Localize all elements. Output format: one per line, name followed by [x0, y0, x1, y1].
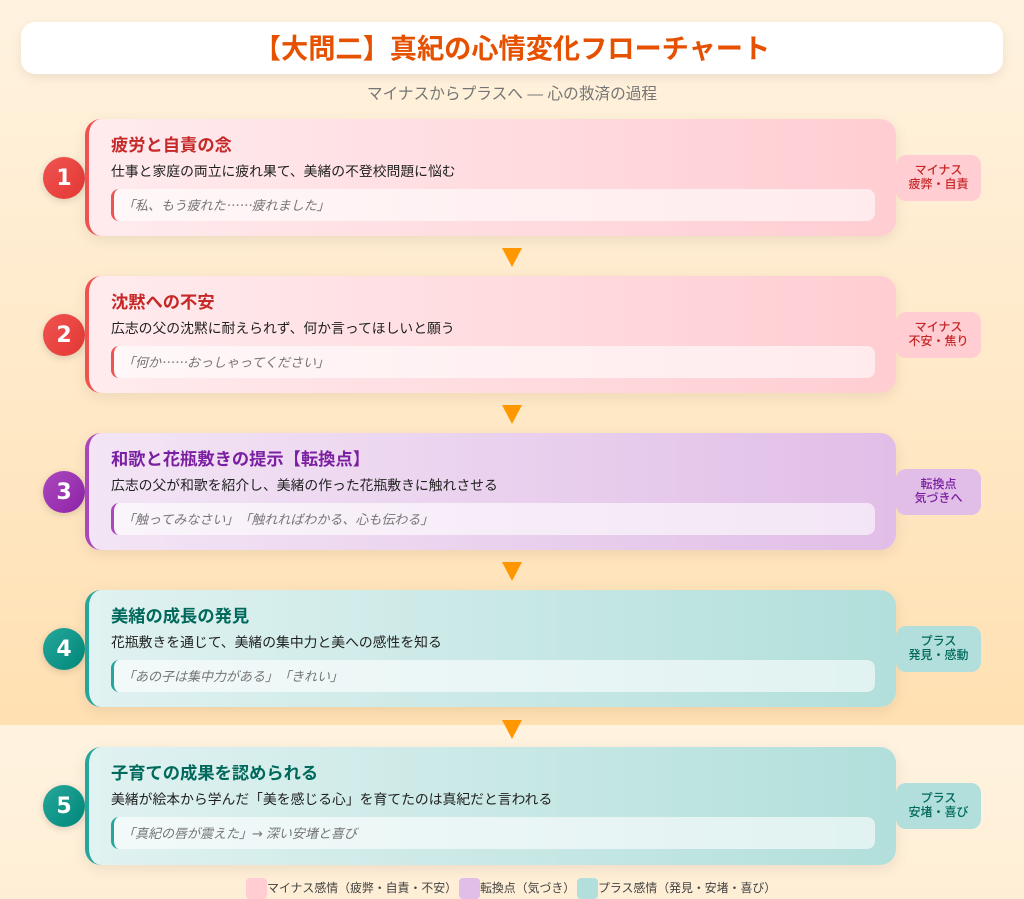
panel: step 5 [85, 747, 896, 865]
legend [246, 878, 776, 899]
legend swatch: minus [246, 878, 267, 899]
step 3 emotion badge: 気づきへ [914, 489, 962, 506]
step 5 emotion badge [896, 783, 981, 829]
step 4 emotion badge: 発見・感動 [908, 646, 968, 663]
step 1 description: 仕事と家庭の両立に疲れ果て、美緒の不登校問題に悩む [111, 160, 456, 180]
step 3 number [43, 471, 85, 513]
step 2 description: 広志の父の沈黙に耐えられず、何か言ってほしいと願う [111, 317, 455, 337]
step 1 emotion badge [896, 155, 981, 201]
step 4 emotion badge [896, 626, 981, 672]
panel: step 2 [85, 276, 896, 393]
step 1 number [43, 157, 85, 199]
step 3 quote [111, 503, 875, 535]
step 2 number: 2 [56, 323, 72, 348]
step 4 quote [111, 660, 875, 692]
title [21, 22, 1003, 74]
subtitle: マイナスからプラスへ — 心の救済の過程 [367, 81, 657, 104]
step 3 heading: 和歌と花瓶敷きの提示【転換点】 [111, 445, 370, 470]
step 2 emotion badge: マイナス [915, 318, 962, 335]
step 1 heading: 疲労と自責の念 [111, 131, 232, 156]
step 1 emotion badge: 疲弊・自責 [908, 175, 968, 192]
step 3 number: 3 [56, 480, 72, 505]
panel: step 3 [85, 433, 896, 550]
step 2 quote [111, 346, 875, 378]
step 5 quote [111, 817, 875, 849]
step 5 emotion badge: 安堵・喜び [908, 803, 968, 820]
legend label: turning point: 転換点（気づき） [480, 879, 575, 896]
step 5 number: 5 [56, 794, 72, 819]
panel: step 1 [85, 119, 896, 236]
panel: step 4 [85, 590, 896, 707]
step 2 emotion badge: 不安・焦り [908, 332, 968, 349]
legend label: minus: マイナス感情（疲弊・自責・不安） [267, 879, 457, 896]
arrow 1 to 2 [502, 248, 522, 267]
step 2 quote: 「何か……おっしゃってください」 [122, 352, 329, 371]
step 5 description: 美緒が絵本から学んだ「美を感じる心」を育てたのは真紀だと言われる [111, 788, 552, 808]
step 1 emotion badge: マイナス [915, 161, 962, 178]
step 2 number [43, 314, 85, 356]
step 3 description: 広志の父が和歌を紹介し、美緒の作った花瓶敷きに触れさせる [111, 474, 498, 494]
step 4 number [43, 628, 85, 670]
step 4 description: 花瓶敷きを通じて、美緒の集中力と美への感性を知る [111, 631, 442, 651]
arrow 3 to 4 [502, 562, 522, 581]
step 5 emotion badge: プラス [921, 789, 956, 806]
step 4 heading: 美緒の成長の発見 [111, 602, 249, 627]
title: 【大問二】真紀の心情変化フローチャート [254, 26, 770, 66]
step 5 heading: 子育ての成果を認められる [111, 759, 318, 784]
step 1 quote: 「私、もう疲れた……疲れました」 [122, 195, 330, 214]
legend swatch: plus [577, 878, 598, 899]
arrow 2 to 3 [502, 405, 522, 424]
step 5 number [43, 785, 85, 827]
legend label: plus: プラス感情（発見・安堵・喜び） [598, 879, 776, 896]
legend swatch: turning point [459, 878, 480, 899]
step 5 quote: 「真紀の唇が震えた」→ 深い安堵と喜び [122, 823, 357, 842]
step 3 emotion badge [896, 469, 981, 515]
step 1 number: 1 [56, 166, 72, 191]
step 1 quote [111, 189, 875, 221]
step 3 quote: 「触ってみなさい」「触れればわかる、心も伝わる」 [122, 509, 433, 528]
step 4 number: 4 [56, 637, 72, 662]
step 4 emotion badge: プラス [921, 632, 956, 649]
step 2 emotion badge [896, 312, 981, 358]
arrow 4 to 5 [502, 720, 522, 739]
step 4 quote: 「あの子は集中力がある」「きれい」 [122, 666, 343, 685]
step 2 heading: 沈黙への不安 [111, 288, 215, 313]
step 3 emotion badge: 転換点 [920, 475, 956, 492]
